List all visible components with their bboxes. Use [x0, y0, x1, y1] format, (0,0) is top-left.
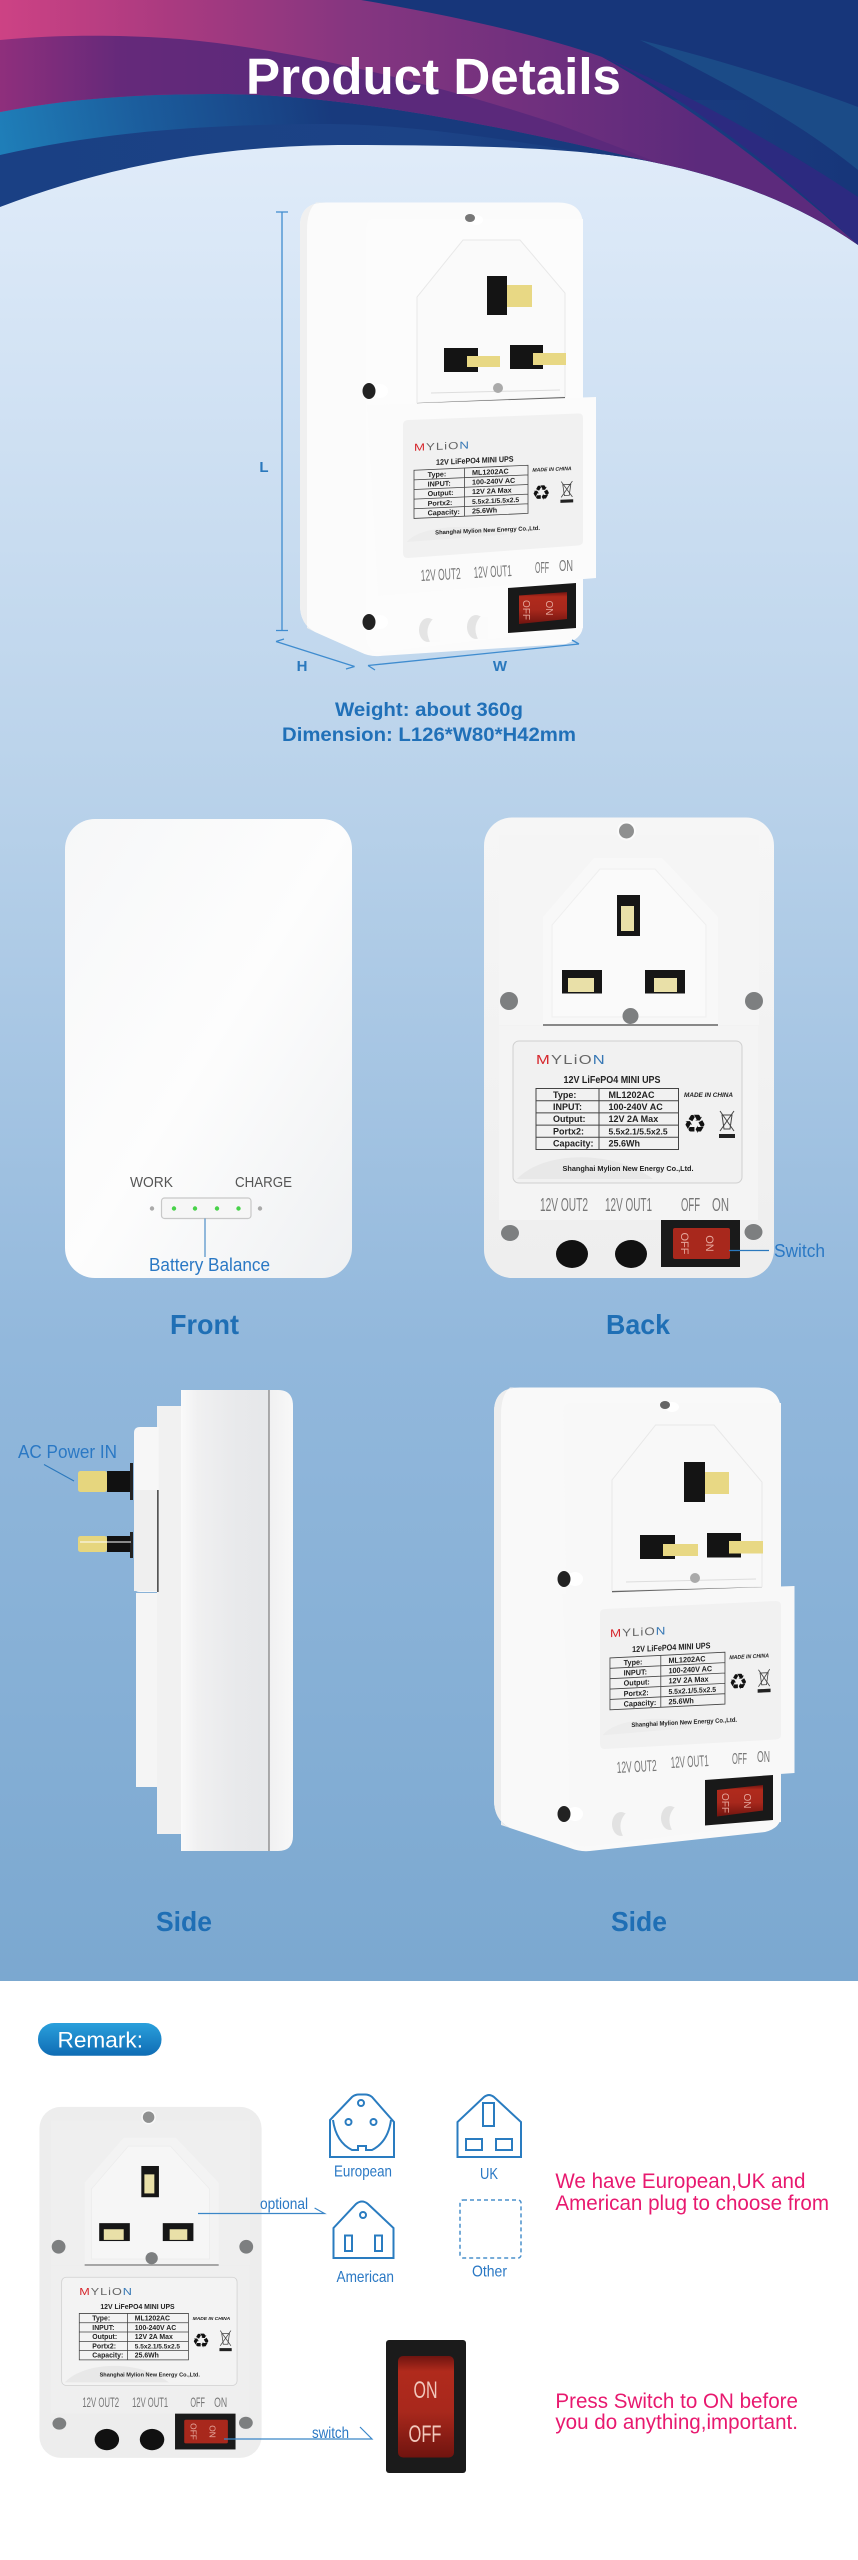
product image: back view with plug options: OFF [188, 2423, 198, 2440]
port labels [616, 1749, 770, 1777]
spec label: MADE IN CHINA [729, 1653, 769, 1661]
port labels: OFF [732, 1751, 747, 1768]
lower module [499, 1026, 758, 1220]
plug options note: We have European,UK and [555, 2170, 805, 2193]
spec label: ♻ [192, 2329, 210, 2352]
AC power callout [18, 1442, 117, 1481]
caption: side right: Side [611, 1906, 667, 1937]
spec label [403, 413, 583, 558]
spec label: MYLiO N [610, 1625, 666, 1640]
spec label: 25.6Wh [668, 1696, 694, 1706]
spec label: MYLiO N [536, 1052, 606, 1067]
spec label: MYLiO N [414, 440, 470, 454]
lower module [562, 1586, 794, 1788]
spec label: Portx2: [553, 1126, 584, 1136]
switch on note: Press Switch to ON before [555, 2390, 798, 2413]
product image: back view with plug options: ON [207, 2425, 218, 2438]
spec label: Portx2: [92, 2344, 116, 2350]
port labels: 12V OUT1 [132, 2395, 168, 2410]
pins [78, 1471, 107, 1492]
spec label: Type: [553, 1090, 576, 1100]
spec label: 25.6Wh [608, 1138, 640, 1148]
port labels [540, 1195, 729, 1215]
label: European: European [334, 2164, 392, 2180]
spec label: 12V LiFePO4 MINI UPS [100, 2302, 175, 2311]
AC power callout: AC Power IN [18, 1442, 117, 1462]
spec label: 12V LiFePO4 MINI UPS [564, 1075, 661, 1086]
spec label: Shanghai Mylion New Energy Co.,Ltd. [100, 2372, 200, 2378]
rocker switch [508, 583, 576, 633]
caption: back: Back [606, 1309, 670, 1340]
spec label: Output: [92, 2334, 117, 2341]
spec label: ML1202AC [608, 1090, 655, 1100]
rocker switch [705, 1775, 773, 1826]
spec label: 12V LiFePO4 MINI UPS [436, 455, 514, 467]
product image: back [484, 818, 774, 1278]
port labels: OFF [535, 560, 549, 577]
battery balance label: Battery Balance [149, 1255, 270, 1275]
spec label: Type: [92, 2316, 110, 2323]
output ports [419, 618, 437, 642]
large rocker switch [386, 2340, 466, 2473]
plug options note [555, 2170, 829, 2215]
dimension labels: H [297, 658, 307, 675]
spec label: MADE IN CHINA [684, 1092, 733, 1099]
port labels: 12V OUT1 [670, 1753, 709, 1772]
spec label: 100-240V AC [668, 1664, 713, 1675]
spec label: Capacity: [428, 508, 460, 517]
dimension labels: L [259, 459, 269, 476]
spec label: Shanghai Mylion New Energy Co.,Ltd. [435, 526, 540, 536]
spec label: Portx2: [624, 1688, 649, 1698]
body [300, 202, 583, 656]
dimension labels: W [493, 658, 508, 675]
remark pill: Remark: [58, 2028, 143, 2052]
port labels: ON [559, 558, 573, 575]
product image: side isometric: ON [741, 1794, 752, 1808]
product image: side isometric: OFF [719, 1793, 730, 1813]
product image: isometric view with dimensions: OFF [520, 600, 531, 620]
weight and dimension text: Dimension: L126*W80*H42mm [282, 725, 576, 746]
lower module [367, 397, 596, 596]
plug [85, 2138, 219, 2265]
large rocker switch: OFF [408, 2421, 442, 2448]
switch on note [555, 2390, 798, 2434]
port labels: 12V OUT2 [82, 2395, 119, 2410]
spec label: 5.5x2.1/5.5x2.5 [608, 1126, 668, 1136]
product image: front: CHARGE [235, 1174, 292, 1191]
spec label: 12V 2A Max [472, 486, 512, 496]
spec label: 5.5x2.1/5.5x2.5 [472, 497, 519, 506]
port labels: 12V OUT1 [473, 563, 512, 582]
output ports [556, 1240, 588, 1268]
spec label: INPUT: [624, 1667, 647, 1678]
plug [543, 858, 718, 1025]
large rocker switch: ON [414, 2377, 438, 2404]
spec label: INPUT: [428, 480, 451, 489]
spec label [600, 1601, 781, 1749]
LED panel [150, 1198, 262, 1218]
label: Other: Other [472, 2264, 508, 2280]
port labels: ON [214, 2395, 227, 2410]
dimension labels [259, 459, 508, 675]
port labels: ON [712, 1195, 729, 1215]
port labels: OFF [190, 2395, 205, 2410]
lower module [51, 2266, 249, 2414]
spec label: Shanghai Mylion New Energy Co.,Ltd. [631, 1717, 737, 1729]
spec label [513, 1041, 742, 1183]
dimension arrows [276, 212, 579, 670]
spec label [62, 2277, 237, 2385]
weight and dimension text: Weight: about 360g [335, 700, 523, 721]
label: UK: UK [480, 2166, 498, 2183]
spec label: MYLiO N [79, 2287, 133, 2298]
product image: back view with plug options [39, 2107, 262, 2458]
spec label: INPUT: [553, 1102, 582, 1112]
output ports [612, 1812, 630, 1836]
spec label: 12V LiFePO4 MINI UPS [632, 1640, 711, 1654]
switch callout [729, 1241, 825, 1261]
output ports [95, 2429, 119, 2450]
port labels: ON [757, 1749, 770, 1766]
weight and dimension text [282, 700, 576, 746]
spec label: ML1202AC [135, 2316, 170, 2323]
port labels: 12V OUT1 [605, 1195, 652, 1215]
title: Product Details [246, 48, 621, 105]
spec label: ♻ [729, 1669, 748, 1696]
spec label: Type: [624, 1657, 642, 1667]
spec label: 100-240V AC [608, 1102, 663, 1112]
header wave banner [0, 0, 858, 260]
remark section background [0, 1981, 858, 2560]
spec label: 12V 2A Max [608, 1114, 658, 1124]
product image: back: ON [703, 1235, 715, 1252]
product image: side profile [78, 1390, 293, 1851]
optional callout arrow: optional [260, 2196, 308, 2213]
spec label: 100-240V AC [135, 2325, 176, 2332]
product image: isometric view with dimensions: ON [543, 600, 554, 616]
spec label: ML1202AC [668, 1654, 706, 1665]
mount holes [469, 215, 483, 225]
product image: side isometric [494, 1388, 794, 1851]
spec label: Capacity: [624, 1698, 656, 1709]
rocker switch [661, 1220, 740, 1267]
optional callout arrow [198, 2196, 324, 2214]
spec label: Shanghai Mylion New Energy Co.,Ltd. [562, 1164, 694, 1173]
switch on note: you do anything,important. [555, 2411, 798, 2434]
port labels: OFF [681, 1195, 700, 1215]
plug body [134, 1427, 159, 1592]
switch callout arrow [224, 2425, 372, 2442]
page background [0, 0, 858, 1981]
indicator labels: WORK [130, 1174, 173, 1191]
product image: front [65, 819, 352, 1278]
switch callout: Switch [774, 1241, 825, 1261]
port labels [420, 558, 573, 585]
spec label: ♻ [683, 1110, 707, 1140]
plug [417, 240, 565, 403]
spec label: Portx2: [428, 499, 452, 508]
spec label: Capacity: [92, 2353, 123, 2360]
icon: American plug [334, 2202, 394, 2258]
plug options note: American plug to choose from [555, 2192, 829, 2215]
spec label: MADE IN CHINA [193, 2316, 231, 2322]
port labels: 12V OUT2 [420, 566, 461, 585]
icon: other plug placeholder [460, 2200, 521, 2258]
spec label: ML1202AC [472, 468, 509, 477]
icon: UK plug [458, 2095, 521, 2157]
caption: side left: Side [156, 1906, 212, 1937]
spec label: 12V 2A Max [668, 1674, 709, 1686]
spec label: 5.5x2.1/5.5x2.5 [668, 1687, 716, 1696]
spec label: Type: [428, 470, 446, 479]
body [494, 1388, 781, 1851]
spec label: 100-240V AC [472, 477, 515, 487]
spec label: Capacity: [553, 1138, 594, 1148]
rocker switch [175, 2414, 236, 2449]
port labels [82, 2395, 227, 2410]
mount holes [665, 1402, 679, 1412]
port labels: 12V OUT2 [540, 1195, 588, 1215]
label: American: American [336, 2269, 394, 2286]
spec label: 25.6Wh [472, 506, 497, 515]
product image: isometric view with dimensions [300, 202, 596, 656]
spec label: MADE IN CHINA [532, 466, 572, 474]
spec label: Output: [624, 1677, 650, 1688]
spec label: INPUT: [92, 2325, 114, 2332]
caption: front: Front [170, 1309, 239, 1340]
spec label: Output: [553, 1114, 585, 1124]
spec label: 12V 2A Max [135, 2334, 173, 2341]
icon: European plug [330, 2094, 394, 2157]
port labels: 12V OUT2 [616, 1758, 657, 1777]
switch callout arrow: switch [312, 2425, 349, 2442]
spec label: ♻ [532, 481, 551, 505]
plug [612, 1425, 762, 1591]
spec label: 5.5x2.1/5.5x2.5 [135, 2344, 180, 2350]
product image: back: OFF [678, 1232, 690, 1255]
spec label: 25.6Wh [135, 2353, 159, 2360]
spec label: Output: [428, 489, 454, 498]
remark pill [38, 2023, 162, 2056]
